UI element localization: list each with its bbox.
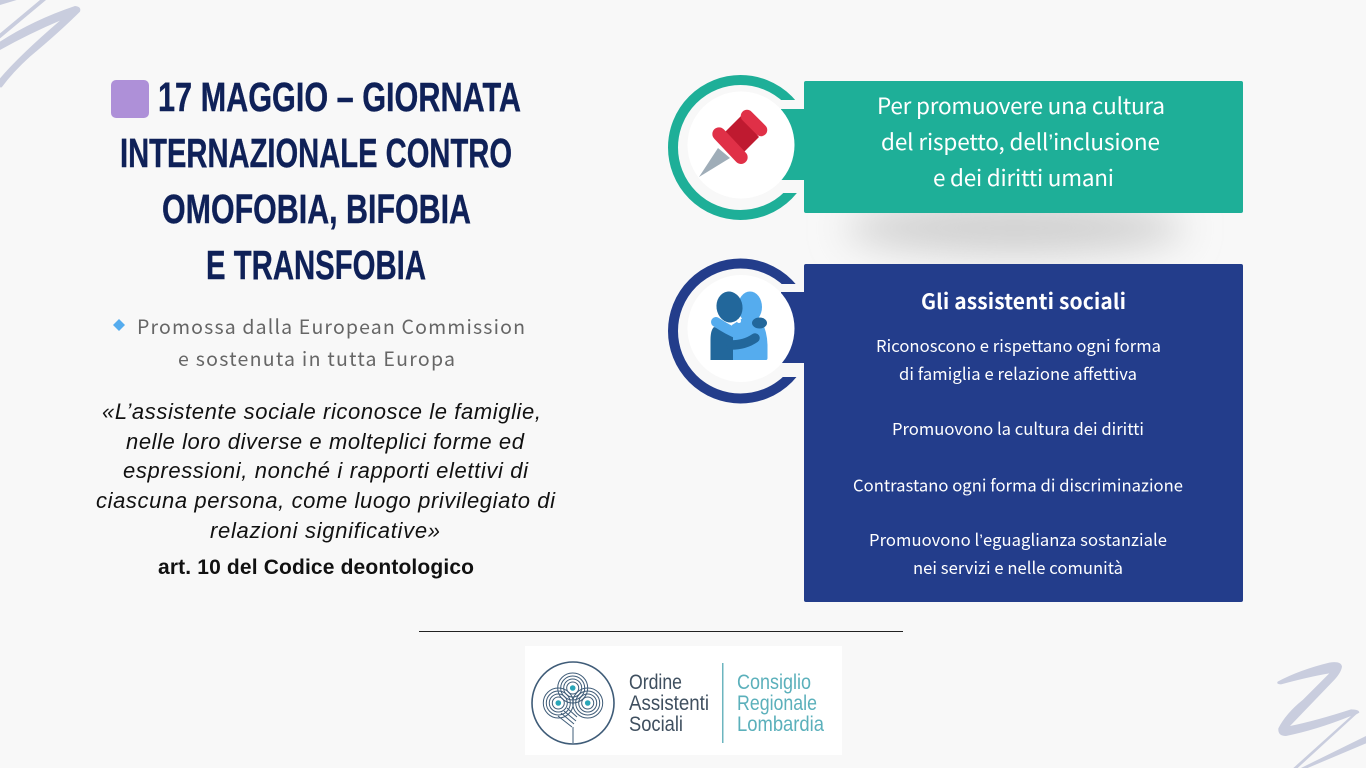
title: 17 MAGGIO – GIORNATA bbox=[158, 74, 521, 120]
panel: blue assistenti sociali: nei servizi e nelle comunità bbox=[913, 555, 1123, 579]
subtitle: Promossa dalla European Commission bbox=[137, 311, 525, 340]
panel: blue assistenti sociali: Contrastano ogni forma di discriminazione bbox=[853, 472, 1183, 496]
quote: «L’assistente sociale riconosce le famiglie, bbox=[102, 399, 541, 424]
quote: ciascuna persona, come luogo privilegiato di bbox=[96, 488, 556, 513]
logo: Consiglio bbox=[737, 671, 811, 694]
subtitle: e sostenuta in tutta Europa bbox=[178, 343, 455, 372]
logo bbox=[525, 646, 842, 755]
logo: Ordine bbox=[629, 671, 682, 694]
logo: Assistenti bbox=[629, 692, 709, 715]
logo: Sociali bbox=[629, 713, 683, 736]
panel: green message: Per promuovere una cultura bbox=[877, 89, 1165, 121]
panel: blue assistenti sociali: Promuovono l’eguaglianza sostanziale bbox=[869, 527, 1167, 551]
panel: blue assistenti sociali: Riconoscono e rispettano ogni forma bbox=[876, 333, 1161, 357]
subtitle bbox=[113, 311, 525, 372]
icon badge: ring blue bbox=[673, 264, 808, 398]
panel: blue assistenti sociali bbox=[804, 264, 1243, 602]
icon: push pin bbox=[699, 116, 761, 177]
panel: blue assistenti sociali: di famiglia e relazione affettiva bbox=[899, 361, 1137, 385]
quote: relazioni significative» bbox=[210, 518, 440, 543]
quote bbox=[96, 399, 556, 543]
quote: espressioni, nonché i rapporti elettivi di bbox=[123, 458, 529, 483]
scribble bottom right bbox=[1277, 662, 1366, 768]
logo: Regionale bbox=[737, 692, 817, 715]
icon badge: ring green bbox=[673, 80, 808, 215]
logo emblem bbox=[532, 662, 614, 744]
title: OMOFOBIA, BIFOBIA bbox=[162, 186, 471, 232]
title marker square bbox=[111, 80, 149, 118]
title: E TRANSFOBIA bbox=[206, 242, 426, 288]
panel heading: Gli assistenti sociali bbox=[921, 286, 1126, 316]
panel: green message bbox=[804, 81, 1243, 213]
title bbox=[111, 74, 521, 288]
title: INTERNAZIONALE CONTRO bbox=[120, 130, 512, 176]
quote: nelle loro diverse e molteplici forme ed bbox=[126, 429, 525, 454]
quote source: art. 10 del Codice deontologico bbox=[158, 556, 474, 579]
panel: blue assistenti sociali: Promuovono la cultura dei diritti bbox=[892, 416, 1144, 440]
logo: Lombardia bbox=[737, 713, 824, 736]
panel shadow bbox=[845, 202, 1185, 254]
panel: green message: del rispetto, dell’inclusione bbox=[881, 125, 1160, 157]
icon: embracing people bbox=[710, 290, 768, 360]
icon: diamond bbox=[113, 319, 125, 331]
scribble top left bbox=[0, 0, 80, 87]
divider line bbox=[419, 631, 903, 632]
panel: green message: e dei diritti umani bbox=[933, 161, 1114, 193]
